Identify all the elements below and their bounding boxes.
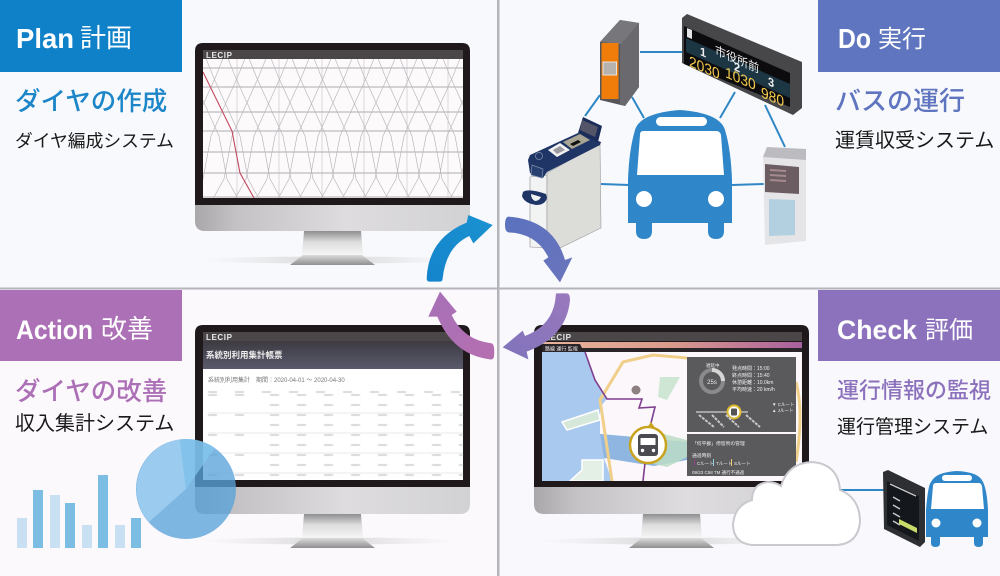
text: schedule improvement: ダイヤの改善 — [15, 378, 167, 406]
monitor: revenue report: 系統別利用集計帳票 — [206, 350, 283, 360]
panel: Plan — [0, 0, 506, 265]
monitor: revenue report: LECIP — [206, 333, 233, 342]
map bus marker — [630, 422, 666, 463]
icon: cloud — [733, 462, 860, 545]
info panel: route detail — [687, 434, 796, 476]
bar chart — [17, 475, 141, 548]
heading: Check — [818, 290, 1000, 361]
connection line — [840, 489, 886, 491]
monitor: timetable diagram — [195, 43, 470, 265]
info panel: operation status: ▼ Cルート — [772, 402, 794, 407]
panel: Action — [0, 290, 470, 548]
info panel: operation status — [687, 357, 796, 432]
icon: large bus — [628, 110, 732, 239]
heading: Check: 評価 — [925, 317, 973, 344]
text: operation management system: 運行管理システム — [837, 416, 988, 438]
map — [542, 352, 802, 481]
text: bus operation: バスの運行 — [835, 86, 965, 116]
heading: Plan: Plan — [16, 23, 74, 54]
text: schedule creation: ダイヤの作成 — [15, 88, 167, 116]
icon: ticket machine — [522, 117, 602, 248]
monitor: bus location map: LECIP — [545, 333, 572, 342]
icon: destination display board: 2 — [734, 59, 740, 76]
text: schedule system: ダイヤ編成システム — [15, 131, 174, 151]
info panel: operation status: 終点時間：15:40 — [732, 372, 770, 379]
heading: Action — [0, 290, 182, 361]
heading: Check: Check — [837, 315, 918, 345]
heading: Do — [818, 0, 1000, 72]
report table: 系統別利用集計 期間：2020-04-01 ～ 2020-04-30 — [208, 376, 345, 384]
arrow: check to action — [503, 293, 570, 359]
monitor: timetable diagram: LECIP — [206, 51, 233, 60]
info panel: operation status: 25s — [707, 380, 717, 386]
monitor: bus location map: 路線 運行 監視 — [545, 346, 578, 352]
text: operation monitoring: 運行情報の監視 — [837, 378, 991, 403]
arrow: do to check — [505, 217, 572, 282]
icon: destination display board: 1030 — [725, 64, 756, 94]
report title bar — [203, 341, 463, 369]
arrow: plan to do — [427, 215, 493, 282]
info panel: route detail: Tルート — [716, 461, 732, 466]
icon: destination display board: 1 — [700, 44, 706, 61]
info panel: operation status: 発点時間：15:00 — [732, 365, 770, 372]
info panel: operation status: 休憩距離：10.0km — [732, 379, 773, 386]
text: fare system: 運賃収受システム — [835, 129, 994, 152]
icon: destination display board: 市役所前 — [715, 42, 759, 76]
monitor: revenue report — [195, 325, 470, 548]
arrow: action to plan — [428, 292, 494, 359]
info panel: operation status: 平均時速：20 km/h — [732, 386, 775, 393]
heading: Do: Do — [838, 23, 871, 54]
PDCA cycle arrows — [427, 215, 572, 359]
panel: Check — [534, 290, 1000, 548]
heading: Plan — [0, 0, 182, 72]
info panel: route detail: Cルート — [697, 461, 714, 466]
pie chart — [136, 439, 236, 539]
report table — [203, 369, 463, 480]
icon: destination display board: 980 — [761, 84, 784, 111]
info panel: route detail: 09/23 C58 TM 通行不通過 — [692, 469, 745, 476]
icon: destination display board: 2030 — [689, 53, 720, 83]
info panel: route detail: 通過時刻 — [692, 452, 711, 459]
heading: Action: Action — [16, 315, 93, 345]
info panel: operation status: 遅延中 — [706, 362, 720, 369]
icon: on-board terminal — [883, 470, 925, 547]
panel: Do — [522, 0, 1000, 248]
icon: destination display board — [682, 14, 802, 115]
icon: orange fare box — [600, 20, 639, 106]
monitor: bus location map — [534, 325, 809, 548]
info panel: route detail: 「何平群」停留所の管理 — [692, 440, 745, 447]
icon: small bus — [926, 471, 988, 547]
heading: Do: 実行 — [878, 26, 926, 53]
icon: destination display board: 3 — [768, 74, 774, 91]
info panel: operation status: ▲ Jルート — [772, 408, 793, 413]
heading: Plan: 計画 — [80, 23, 132, 53]
info panel: route detail: Sルート — [734, 461, 751, 466]
network lines — [585, 52, 785, 185]
icon: card reader — [763, 147, 806, 245]
text: revenue system: 収入集計システム — [15, 412, 174, 435]
heading: Action: 改善 — [101, 314, 153, 344]
chart: diagram lines — [203, 59, 463, 198]
